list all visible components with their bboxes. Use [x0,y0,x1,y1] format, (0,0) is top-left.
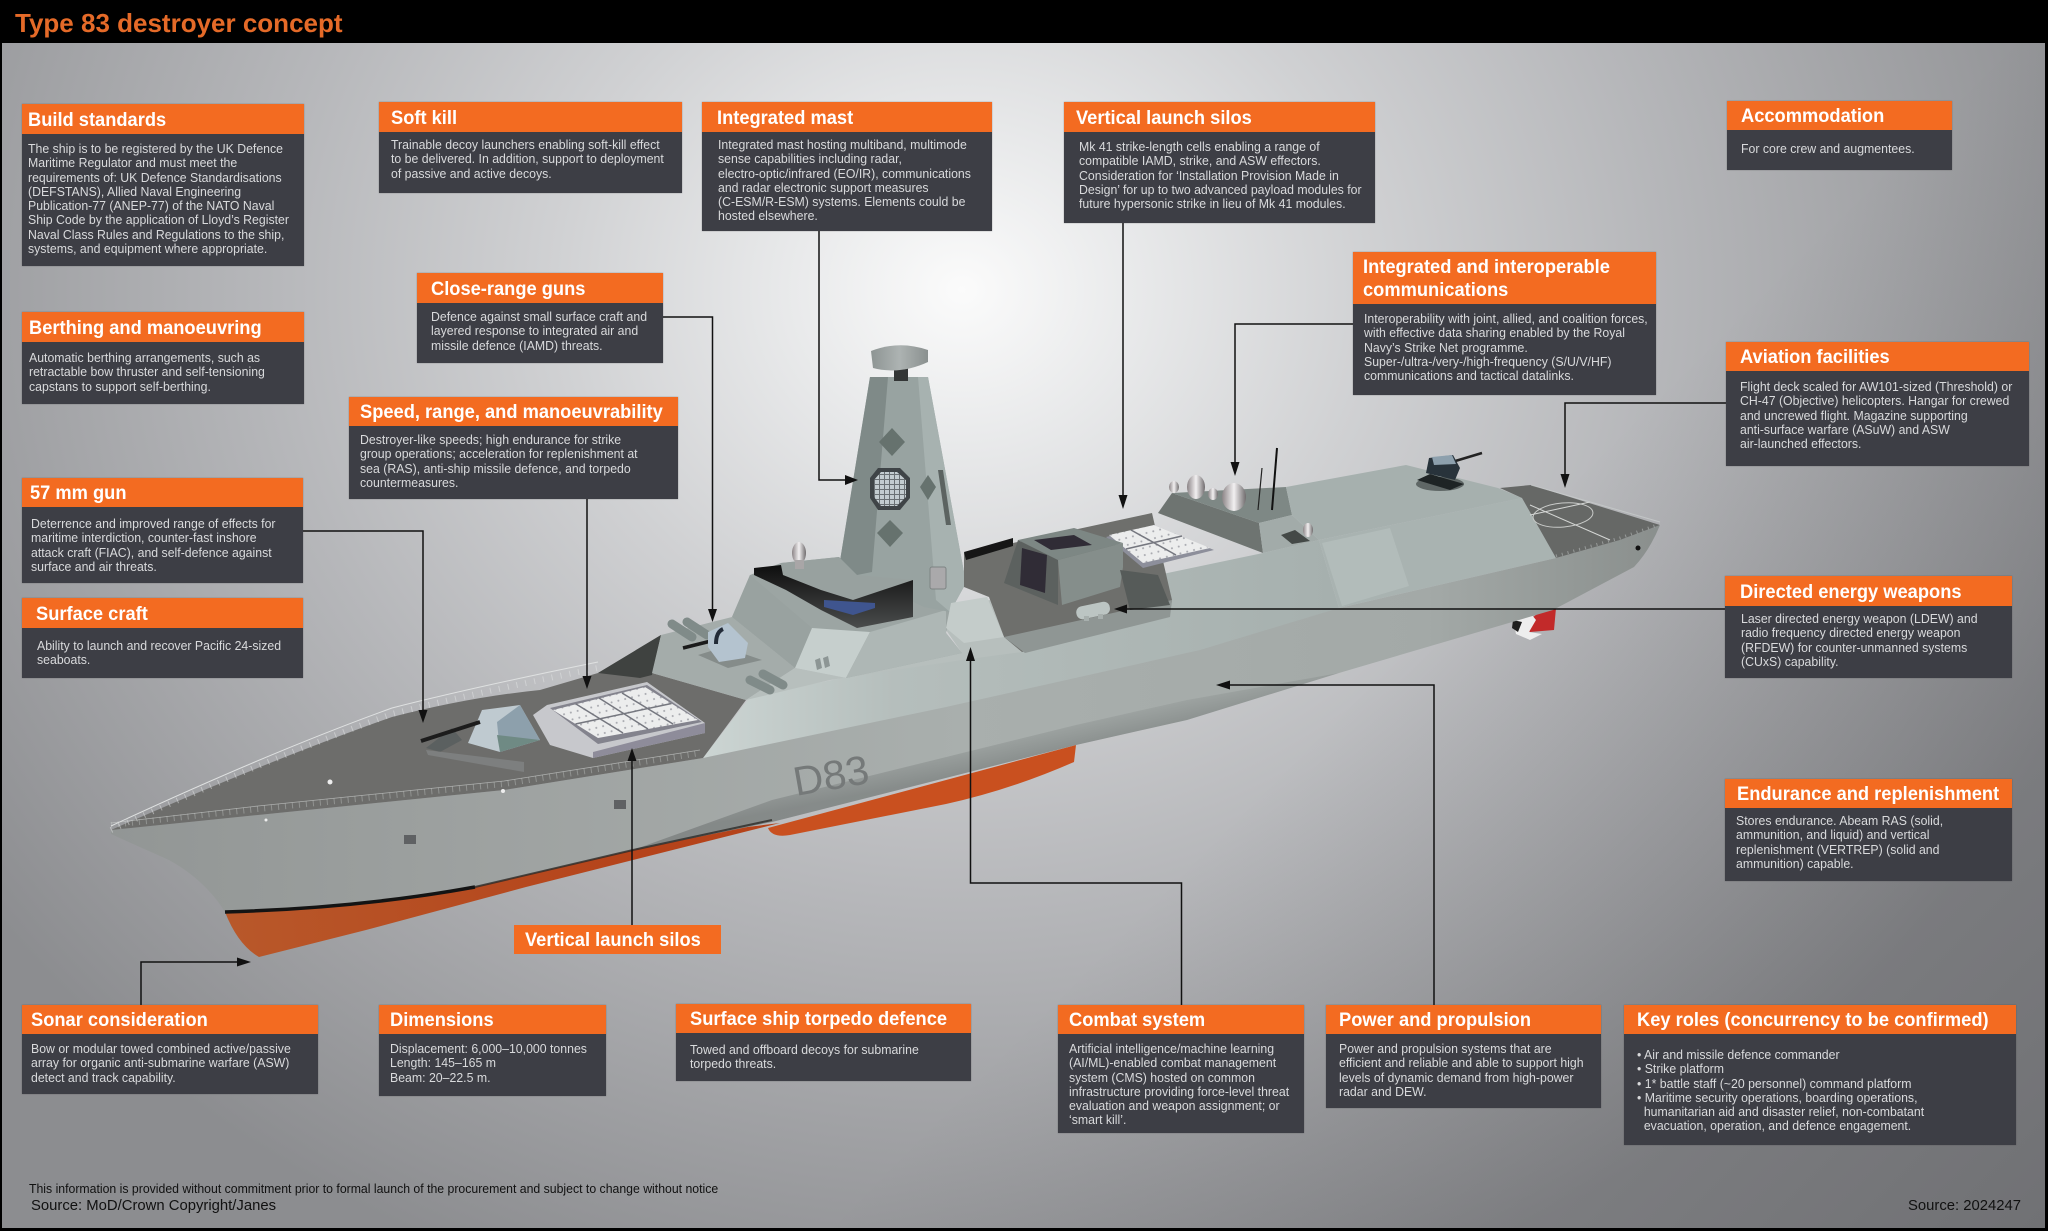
arrow: vertical launch silos (forward) [628,748,636,925]
text: Navy’s Strike Net programme. [1364,340,1528,355]
arrow: 57 mm gun [303,531,428,723]
text: (CUxS) capability. [1741,654,1839,669]
text: Power and propulsion systems that are [1339,1041,1552,1056]
text: Artificial intelligence/machine learning [1069,1041,1274,1056]
panel: accommodation [1727,101,1952,170]
arrow: directed energy weapons [1114,604,1725,614]
text: group operations; acceleration for replenishment at [360,446,638,461]
text [1740,379,2012,451]
text: to be delivered. In addition, support to deployment [391,151,664,166]
text: (DEFSTANS), Allied Naval Engineering [28,184,241,199]
deck tank [1075,601,1111,621]
text: evaluation and weapon assignment; or [1069,1098,1280,1113]
panel: aviation facilities [1726,342,2029,466]
text: • Maritime security operations, boarding operations, [1637,1090,1918,1105]
communications domes [1222,483,1246,511]
heading: Vertical launch silos [1076,107,1252,129]
text: Length: 145–165 m [390,1055,496,1070]
text: layered response to integrated air and [431,323,638,338]
text: Destroyer-like speeds; high endurance for strike [360,432,621,447]
text: • Strike platform [1637,1061,1724,1076]
heading [22,104,304,134]
text: ammunition) capable. [1736,856,1854,871]
text: replenishment (VERTREP) (solid and [1736,842,1939,857]
heading: Endurance and replenishment [1737,783,1999,805]
text: evacuation, operation, and defence engagement. [1644,1118,1911,1133]
aft superstructure mid block [1158,448,1319,553]
aft vertical launch silos [1106,525,1214,568]
heading [1726,342,2029,371]
text: compatible IAMD, strike, and ASW effectors. [1078,153,1320,168]
text: Towed and offboard decoys for submarine [690,1042,919,1057]
text: Automatic berthing arrangements, such as [29,350,260,365]
text: air-launched effectors. [1740,436,1861,451]
panel: vertical launch silos (top) [1064,102,1375,223]
text: infrastructure providing force-level threat [1069,1084,1289,1099]
text: torpedo threats. [690,1056,776,1071]
forward vertical launch silos [533,682,705,758]
heading: Speed, range, and manoeuvrability [360,401,663,423]
text: Displacement: 6,000–10,000 tonnes [390,1041,587,1056]
heading [417,273,663,303]
heading: Dimensions [390,1009,494,1031]
hull scuttles [264,780,626,844]
mast radar [894,364,908,381]
text [690,1042,919,1071]
text: ‘smart kill’. [1069,1112,1126,1127]
heading: 57 mm gun [30,482,127,504]
text: sense capabilities including radar, [718,151,901,166]
text: • 1* battle staff (~20 personnel) command platform [1637,1076,1911,1091]
text [360,432,638,490]
heading [1064,102,1375,132]
text: Mk 41 strike-length cells enabling a range of [1078,139,1319,154]
text [1069,1041,1290,1127]
close-range gun [683,623,762,668]
mast array [870,468,910,510]
panel: integrated and interoperable communications [1353,252,1656,395]
text: ammunition, and liquid) and vertical [1736,827,1929,842]
text: retractable bow thruster and self-tensioning [29,364,265,379]
arrow: power and propulsion [1216,680,1434,1005]
heading: Integrated mast [717,107,853,129]
text: of passive and active decoys. [391,166,552,181]
arrow: integrated mast [819,231,858,485]
heading: Berthing and manoeuvring [29,317,262,339]
text: surface and air threats. [30,559,156,574]
text [431,309,647,353]
text: with effective data sharing enabled by the Royal [1364,325,1625,340]
text: Stores endurance. Abeam RAS (solid, [1736,813,1943,828]
text: (C-ESM/R-ESM) systems. Elements could be [718,194,965,209]
text: and radar electronic support measures [718,180,928,195]
callout: vertical launch silos (forward) [514,925,721,954]
arrow: speed, range, and manoeuvrability [582,499,592,689]
heading: Close-range guns [431,278,585,300]
text [31,1041,291,1085]
hull [111,525,1660,912]
text: Defence against small surface craft and [431,309,647,324]
panel: surface craft [22,598,303,678]
text: radar and DEW. [1339,1084,1427,1099]
forward wedge shadow [598,635,661,678]
panel: endurance and replenishment [1725,779,2012,881]
text: hosted elsewhere. [718,208,817,223]
heading: Surface ship torpedo defence [690,1008,947,1030]
heading [379,1005,606,1034]
text: missile defence (IAMD) threats. [431,338,603,353]
text [1741,611,1978,669]
forward superstructure [652,557,1022,700]
aft gun [1416,453,1482,491]
panel: close-range guns [417,273,663,363]
ship [111,345,1660,957]
text: detect and track capability. [31,1070,176,1085]
text [391,137,664,181]
text: and uncrewed flight. Magazine supporting [1740,408,1968,423]
sonar dome [768,745,1076,836]
panel: dimensions [379,1005,606,1096]
text [1736,813,1943,871]
text: The ship is to be registered by the UK Defence [28,141,283,156]
arrow: aviation facilities [1560,403,1726,488]
heading [22,478,303,507]
text: seaboats. [37,652,90,667]
panel: sonar consideration [22,1005,318,1094]
bridge [754,542,913,628]
upper hull side [703,540,1339,758]
heading: Integrated and interoperable [1363,256,1609,278]
heading: communications [1363,279,1508,301]
rudder and propeller [1512,608,1556,640]
text [1637,1047,1924,1133]
panel: integrated mast [702,102,992,231]
text: Bow or modular towed combined active/passive [31,1041,291,1056]
text: requirements of: UK Defence Standardisations [28,170,282,185]
heading: Key roles (concurrency to be confirmed) [1637,1009,1989,1031]
near guard rail [111,753,700,825]
heading [702,102,992,132]
breakwater [946,597,1004,643]
text: Trainable decoy launchers enabling soft-kill effect [391,137,660,152]
text: For core crew and augmentees. [1741,141,1915,156]
heading: Surface craft [36,603,148,625]
text [1078,139,1362,211]
antennas [1272,448,1277,510]
heading: Directed energy weapons [1740,581,1962,603]
text [1339,1041,1584,1099]
boot topping [225,887,475,912]
panel: soft kill [379,102,682,193]
source number: Source: 2024247 [1908,1198,2021,1214]
panel: directed energy weapons [1725,576,2012,678]
text: Flight deck scaled for AW101-sized (Threshold) or [1740,379,2012,394]
panel: berthing and manoeuvring [22,312,304,404]
text [30,516,276,574]
midship deck [964,513,1172,652]
text [390,1041,587,1085]
text: Publication-77 (ANEP-77) of the NATO Naval [28,198,274,213]
mast diamonds [877,428,936,547]
flight deck [1500,485,1660,558]
panel: surface ship torpedo defence [676,1004,971,1081]
text: Consideration for ‘Installation Provision Made in [1078,168,1338,183]
heading [22,312,304,342]
footnote: This information is provided without commitment prior to formal launch of the procurement and subject to change without notice [29,1181,718,1196]
callout: vertical launch silos (forward): Vertical launch silos [525,929,701,951]
source credit: Source: MoD/Crown Copyright/Janes [31,1198,276,1214]
text: array for organic anti-submarine warfare (ASW) [31,1055,289,1070]
heading [379,102,682,132]
arrow: close-range guns [663,317,717,622]
heading [1725,576,2012,606]
heading: Accommodation [1741,105,1884,127]
panel: key roles [1624,1005,2016,1145]
text [28,141,289,256]
text: attack craft (FIAC), and self-defence against [30,545,271,560]
panel: power and propulsion [1326,1005,1601,1108]
text: (AI/ML)-enabled combat management [1069,1055,1276,1070]
heading [676,1004,971,1033]
panel: 57 mm gun [22,478,303,583]
foredeck [111,635,746,830]
far side slit [964,538,1013,560]
heading: Soft kill [391,107,457,129]
text: • Air and missile defence commander [1637,1047,1840,1062]
waterline shading [633,673,1339,850]
far guard rail [111,662,598,826]
text [718,137,970,223]
deck lip [1004,600,1172,653]
fore mount tubes [672,622,783,690]
heading [1624,1005,2016,1034]
heading: Aviation facilities [1740,346,1890,368]
integrated mast [839,345,966,612]
heading: Combat system [1069,1009,1205,1031]
text: Maritime Regulator and must meet the [28,155,237,170]
text: countermeasures. [360,475,458,490]
heading [22,598,303,628]
midship enclosure [1004,528,1170,610]
panel: combat system [1058,1005,1304,1133]
57 mm gun [421,705,540,772]
arrow: vertical launch silos (aft) [1118,223,1128,509]
text [37,638,281,667]
text: electro-optic/infrared (EO/IR), communications [718,166,970,181]
text: systems, and equipment where appropriate. [28,241,267,256]
heading [1727,101,1952,130]
text: Super-/ultra-/very-/high-frequency (S/U/V/HF) [1364,354,1611,369]
title: Type 83 destroyer concept [15,8,343,38]
text: humanitarian aid and disaster relief, non-combatant [1644,1104,1924,1119]
arrow: sonar consideration [141,958,251,1005]
arrow: combat system [966,647,1182,1005]
text: system (CMS) hosted on common [1069,1070,1255,1085]
heading: Sonar consideration [31,1009,208,1031]
text: communications and tactical datalinks. [1364,368,1574,383]
panel: build standards [22,104,304,266]
heading [22,1005,318,1034]
panel: speed, range, and manoeuvrability [349,397,678,499]
text: Integrated mast hosting multiband, multimode [718,137,966,152]
text: Ship Code by the application of Lloyd’s Register [28,212,289,227]
text: Ability to launch and recover Pacific 24-sized [37,638,281,653]
heading [1326,1005,1601,1034]
keel and antifouling [225,823,780,957]
text: Naval Class Rules and Regulations to the ship, [28,227,284,242]
text: sea (RAS), anti-ship missile defence, and torpedo [360,461,631,476]
text: CH-47 (Objective) helicopters. Hangar for crewed [1740,393,2009,408]
text: Interoperability with joint, allied, and coalition forces, [1364,311,1648,326]
text: Laser directed energy weapon (LDEW) and [1741,611,1978,626]
text: (RFDEW) for counter-unmanned systems [1741,640,1967,655]
heading: Power and propulsion [1339,1009,1531,1031]
text: efficient and reliable and able to support high [1339,1055,1584,1070]
text: radio frequency directed energy weapon [1741,625,1960,640]
text: Design’ for up to two advanced payload modules for [1078,182,1361,197]
hangar [1281,465,1556,608]
heading: Build standards [28,109,166,131]
arrow: communications [1230,324,1353,476]
heading [1725,779,2012,808]
hull number D83: D83 [790,746,872,805]
text: Beam: 20–22.5 m. [390,1070,491,1085]
text: anti-surface warfare (ASuW) and ASW [1740,422,1950,437]
heading [349,397,678,426]
heading [1058,1005,1304,1034]
text [1364,311,1648,383]
text [29,350,265,394]
text: levels of dynamic demand from high-power [1339,1070,1573,1085]
text: capstans to support self-berthing. [29,379,211,394]
text: Deterrence and improved range of effects for [30,516,275,531]
text: future hypersonic strike in lieu of Mk 41 modules. [1078,196,1345,211]
heading [1353,252,1656,304]
text: maritime interdiction, counter-fast inshore [30,530,256,545]
